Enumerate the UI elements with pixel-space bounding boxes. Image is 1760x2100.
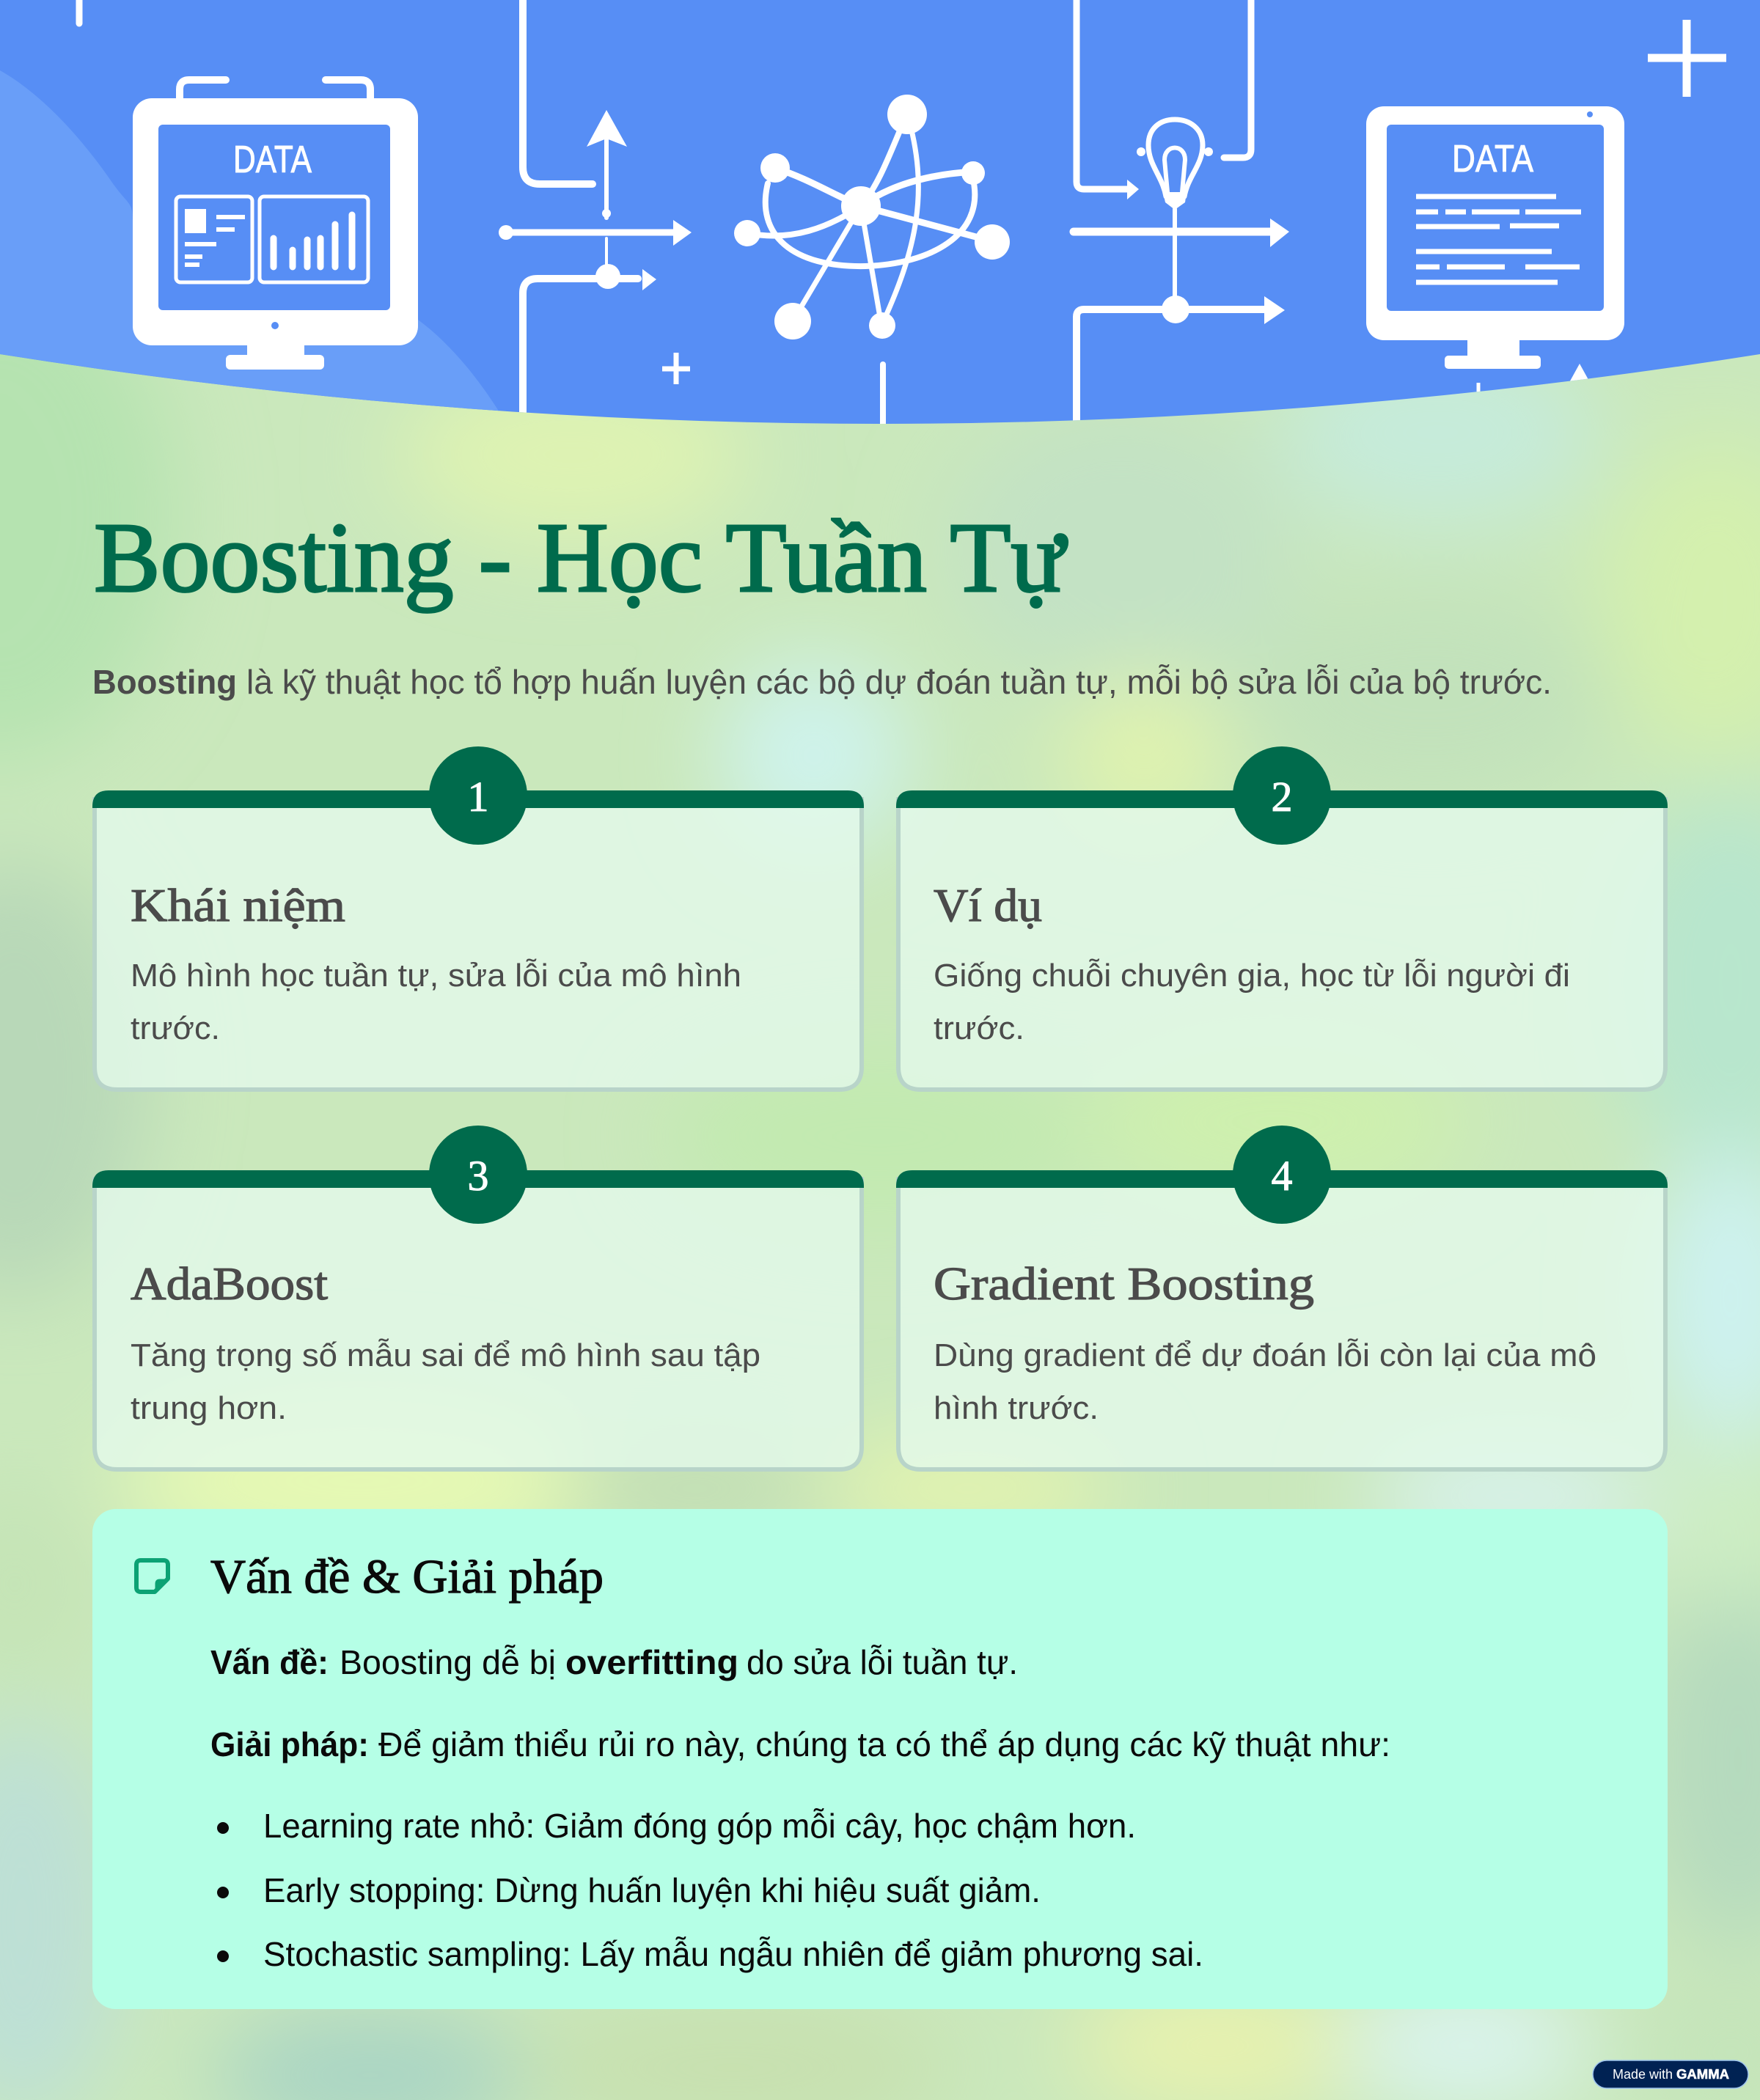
icon: note: [136, 1560, 168, 1592]
heading: AdaBoost: [131, 1258, 328, 1310]
intro text: Boosting: [92, 663, 237, 701]
bullet list: Early stopping: Dừng huấn luyện khi hiệu suất giảm.: [263, 1871, 1041, 1909]
icon: right data monitor: DATA: [1452, 138, 1533, 180]
body: [934, 1337, 1596, 1426]
body: Tăng trọng số mẫu sai để mô hình sau tập: [131, 1337, 760, 1373]
heading: Ví dụ: [934, 879, 1042, 931]
body: [131, 958, 741, 1046]
icon: left data monitor: DATA: [233, 139, 312, 181]
badge: made with gamma: [1593, 2060, 1748, 2088]
badge: made with gamma: GAMMA: [1676, 2067, 1729, 2082]
bullet list: Stochastic sampling: Lấy mẫu ngẫu nhiên để giảm phương sai.: [263, 1935, 1203, 1973]
body: Giống chuỗi chuyên gia, học từ lỗi người đi: [934, 958, 1570, 994]
solution text: Giải pháp:: [210, 1725, 369, 1763]
panel: card 2 ví dụ: [896, 746, 1668, 1090]
body: Mô hình học tuần tự, sửa lỗi của mô hình: [131, 958, 741, 994]
bullet list: Learning rate nhỏ: Giảm đóng góp mỗi cây, học chậm hơn.: [263, 1807, 1136, 1845]
intro text: là kỹ thuật học tổ hợp huấn luyện các bộ dự đoán tuần tự, mỗi bộ sửa lỗi của bộ trước.: [246, 663, 1552, 701]
body: [131, 1337, 760, 1426]
problem text: overfitting: [565, 1643, 738, 1681]
icon: left data monitor: [133, 80, 418, 370]
problem text: Boosting dễ bị: [340, 1643, 556, 1681]
icon: network graph: [734, 95, 1010, 440]
badge: made with gamma: Made with: [1613, 2067, 1673, 2082]
panel: card 3 adaboost: [92, 1126, 864, 1469]
problem text: Vấn đề:: [210, 1643, 329, 1681]
problem text: [210, 1643, 1018, 1681]
badge 1: 1: [468, 773, 488, 820]
icon: right data monitor: [1366, 106, 1624, 369]
title: Boosting - Học Tuần Tự: [94, 503, 1068, 613]
icon: light bulb: [1137, 120, 1213, 210]
heading: Khái niệm: [131, 879, 345, 931]
header illustration: [0, 0, 1760, 440]
body: Dùng gradient để dự đoán lỗi còn lại của mô: [934, 1337, 1596, 1373]
badge 4: 4: [1272, 1152, 1292, 1200]
body: trước.: [934, 1010, 1024, 1046]
badge 2: 2: [1272, 773, 1292, 820]
badge 4: [1233, 1126, 1331, 1224]
problem text: do sửa lỗi tuần tự.: [747, 1643, 1018, 1681]
badge 3: 3: [468, 1152, 488, 1200]
badge 3: [429, 1126, 527, 1224]
icon: partial arrow at curve edge: [1478, 364, 1591, 400]
icon: large plus: [1648, 20, 1726, 97]
icon: small plus: [662, 353, 690, 384]
badge 2: [1233, 746, 1331, 845]
bullet list: [217, 1807, 1203, 1973]
panel: card 4 gradient boosting: [896, 1126, 1668, 1469]
body: hình trước.: [934, 1390, 1099, 1426]
body: [934, 958, 1570, 1046]
heading: Gradient Boosting: [934, 1258, 1314, 1310]
panel: callout problem and solution: [92, 1509, 1668, 2009]
body: trung hơn.: [131, 1390, 287, 1426]
icon: right connector arrows: [1074, 0, 1289, 440]
badge 1: [429, 746, 527, 845]
callout heading: Vấn đề & Giải pháp: [210, 1550, 604, 1604]
body: trước.: [131, 1010, 220, 1046]
panel: card 1 khái niệm: [92, 746, 864, 1090]
icon: left connector arrows: [499, 0, 692, 440]
solution text: Để giảm thiểu rủi ro này, chúng ta có thể áp dụng các kỹ thuật như:: [378, 1725, 1390, 1763]
